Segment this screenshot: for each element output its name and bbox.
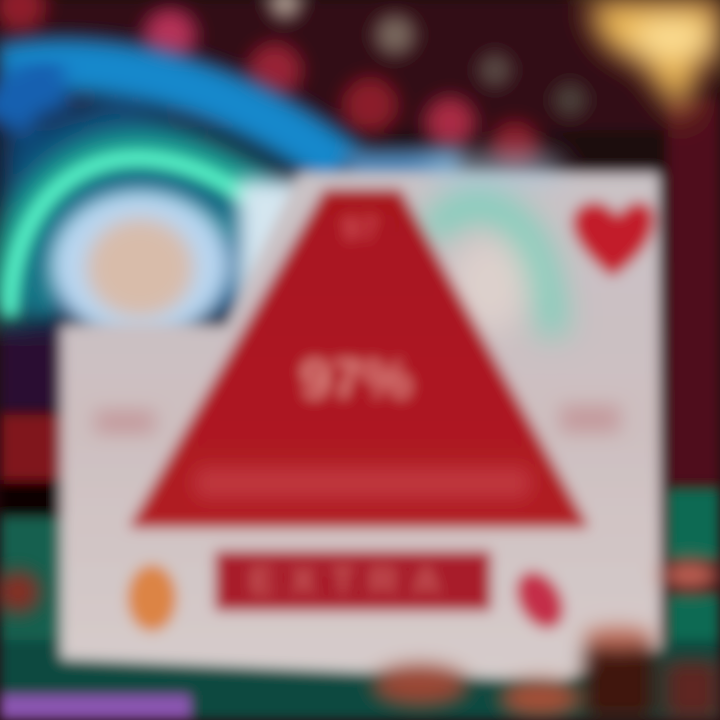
icon: orange emblem	[128, 565, 176, 631]
decoration: ceiling lights	[0, 0, 587, 169]
text block: left faint note	[95, 410, 155, 434]
pyramid percentage: 97%	[300, 347, 412, 410]
decoration: foreground blurred chips	[372, 561, 720, 720]
decoration: pale circle behind the card	[50, 150, 460, 341]
decoration: lamp top right	[590, 0, 720, 118]
decoration: neon rainbow arcs	[0, 66, 345, 320]
pyramid top label: 97	[341, 210, 379, 248]
pyramid lower band	[195, 468, 530, 498]
icon: red heart top right	[573, 203, 653, 276]
text block: right faint note	[560, 405, 620, 433]
panel: pale card	[60, 172, 662, 682]
decoration: green arc on card	[430, 170, 560, 335]
icon: red heart lower	[508, 564, 572, 636]
dark blue backing	[0, 90, 300, 320]
button: red banner	[216, 552, 490, 610]
chart: red pyramid	[130, 190, 588, 527]
banner text: EXTRA	[249, 559, 455, 603]
